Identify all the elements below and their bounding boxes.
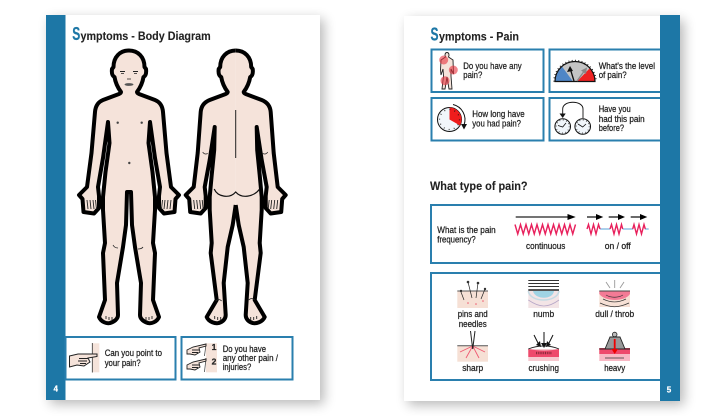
icon: crushing [528,332,559,373]
box: how long have you had pain [432,98,544,140]
icon: crushing: crushing [528,363,559,373]
icon: dull / throb: dull / throb [595,309,634,319]
icon: dull / throb [595,280,634,319]
heading: what type of pain: What type of pain? [430,179,528,193]
box: what's the level of pain [550,50,662,92]
chart: continuous [515,214,576,251]
icon: pins and needles: pins and [458,309,488,319]
box: do you have any pain [432,50,544,92]
text: Can you point to [105,348,162,358]
box: have you had this pain before: had this pain [599,114,645,124]
box: can you point to your pain: your pain? [105,358,141,368]
page number 4: 4 [53,385,58,394]
heading: Symptoms - Pain: ymptoms - Pain [439,30,519,44]
body diagram: front [79,50,179,323]
text: What's the level [599,61,655,71]
box: do you have any pain: pain? [463,70,482,80]
icon: numb [528,280,559,319]
text: What is the pain [437,225,496,235]
icon: pins and needles [457,281,488,329]
text: How long have [472,109,525,119]
heading: Symptoms - Pain [430,24,519,44]
icon: sharp [457,331,488,373]
icon: clock with red sector [438,104,467,132]
box: any other pain or injuries [182,337,292,380]
face [120,72,138,86]
chart: on / off [587,214,649,251]
body marks [116,122,143,164]
text: Have you [599,104,631,114]
icon: pins and needles: needles [459,319,487,329]
icon: two clocks with return arrow [555,102,590,134]
box: can you point to your pain [66,337,176,380]
heading: Symptoms - Body Diagram [72,24,211,44]
box: have you had this pain before: before? [599,123,624,133]
box: what's the level of pain: of pain? [599,70,627,80]
box: how long have you had pain: you had pain? [472,119,521,129]
right page blue strip [660,15,680,401]
icon: heavy [599,332,630,373]
icon: heavy: heavy [604,363,626,373]
icon: pain level gauge [554,60,596,82]
spine and buttocks [235,110,237,158]
icon: two pointing hands with numbers [187,342,217,372]
box: any other pain or injuries: injuries? [223,362,251,372]
heading: Symptoms - Pain: S [430,24,438,44]
icon: two pointing hands with numbers: 2 [212,356,217,366]
box: have you had this pain before [550,98,662,140]
left page blue strip [46,15,66,400]
heading: Symptoms - Body Diagram: S [72,24,80,44]
icon: body with red pain spots [439,52,458,89]
panel: pain frequency [431,205,661,263]
icon: pointing hand [70,343,99,372]
text: Do you have any [463,61,522,71]
body diagram: back [186,50,286,323]
panel: pain types [431,273,661,380]
icon: two pointing hands with numbers: 1 [212,342,217,352]
icon: numb: numb [533,309,554,319]
panel: left page [46,15,320,400]
chart: continuous: continuous [526,241,566,251]
text: Do you have [223,344,266,354]
icon: sharp: sharp [462,363,483,373]
panel: right page [404,15,680,401]
page number 5: 5 [667,386,672,395]
box: any other pain or injuries: any other pain / [223,353,278,363]
panel: pain frequency: frequency? [437,235,476,245]
chart: on / off: on / off [605,241,631,251]
heading: Symptoms - Body Diagram: ymptoms - Body Diagram [80,29,211,43]
